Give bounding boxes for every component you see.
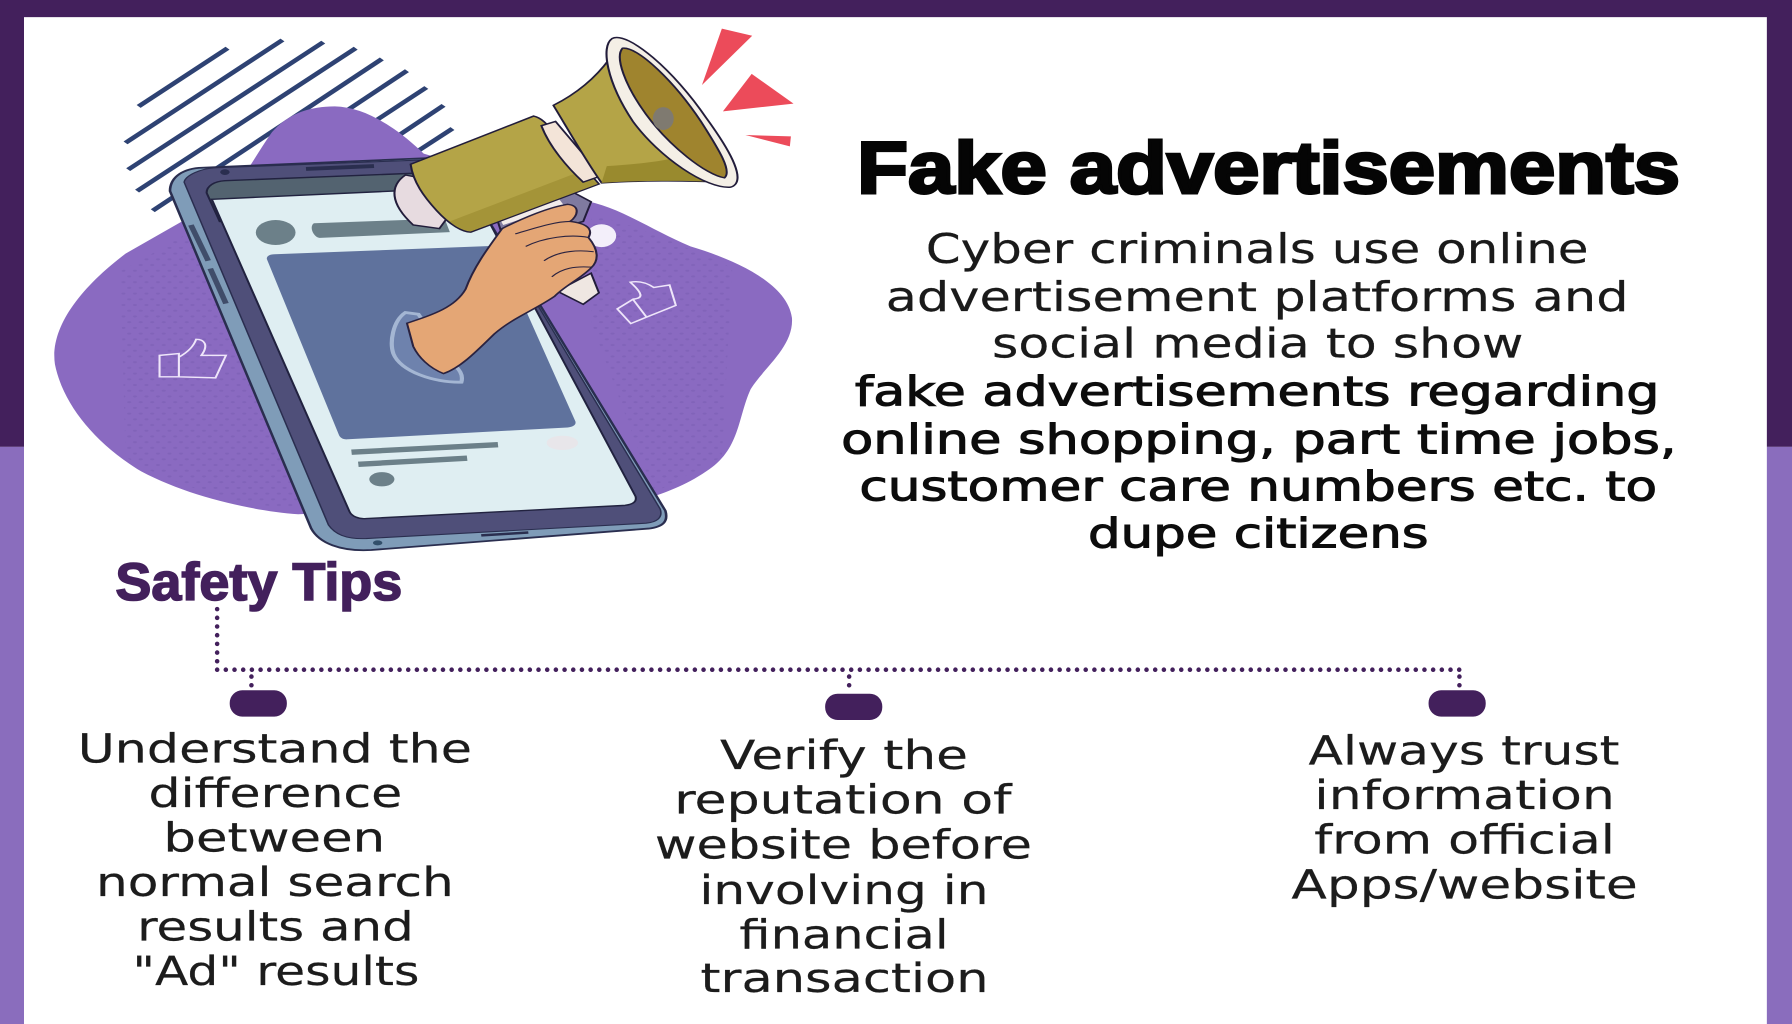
tip 2 text: transaction [701,956,989,1002]
camera [220,169,230,175]
tip 1 text: normal search [96,860,454,906]
bottom dot [373,540,382,545]
horn rim [606,38,738,187]
phone bezel [184,159,661,539]
tip 2 text: involving in [699,868,989,914]
name bar [312,219,450,238]
reaction marks [547,436,578,450]
tip 3 text: information [1314,773,1615,819]
tip 2 text: financial [739,913,949,959]
caption lines [352,445,498,464]
description text: advertisement platforms and [886,273,1629,321]
ad image [267,246,576,439]
description text: fake advertisements regarding [855,368,1659,416]
finger lines [515,221,594,277]
tip marker 3 [1429,690,1486,717]
avatar [256,220,296,245]
horn knob [653,107,674,130]
handle grip light [497,196,564,225]
tip 1 text: Understand the [78,726,472,772]
description text: Cyber criminals use online [926,225,1589,273]
handle lower end [557,273,599,304]
screen [212,188,636,519]
speaker bottom [481,532,528,535]
comment bubble [369,472,394,486]
horn [553,59,724,183]
tip 2 text: reputation of [674,778,1013,824]
phone [170,157,666,550]
handle [494,189,591,243]
horn shade [602,154,724,183]
tip marker 2 [825,694,882,720]
tip 1 text: "Ad" results [133,949,419,995]
arm [407,204,597,374]
title: Fake advertisements [857,128,1680,209]
thumbs up icon right [617,282,676,324]
white patch [587,224,616,247]
illustration: phone with megaphone [54,29,794,550]
thumbs up icon left [160,339,226,378]
background: light purple frame [0,447,1792,1024]
hole in screen [392,312,462,382]
description text: dupe citizens [1088,509,1429,557]
phone rim [170,157,666,550]
tip 3 text [1291,729,1638,908]
body shade [450,171,598,231]
tip 3 text: from official [1314,818,1615,864]
striped circle [126,40,452,211]
purple blob [54,106,792,514]
background: dark purple frame [0,0,1792,447]
horn inside [620,48,727,178]
description text: social media to show [992,320,1523,368]
tip 1 text [78,726,472,995]
tip 3 text: Always trust [1309,729,1619,775]
tip 2 text: Verify the [720,733,968,779]
side buttons [191,225,226,304]
phone top strip [207,171,502,250]
arm and hand [407,204,597,374]
speaker top [306,166,374,169]
tip 2 text: website before [655,822,1032,868]
tip 1 text: results and [137,905,414,951]
tip 1 text: between [163,815,385,861]
megaphone [394,38,738,304]
dotted connector [217,609,1461,686]
description text: online shopping, part time jobs, [841,416,1677,464]
safety tips heading: Safety Tips [115,553,402,612]
tip 1 text: difference [149,771,402,817]
red burst lines [702,29,794,146]
description text: customer care numbers etc. to [859,463,1657,511]
tip 2 text [655,733,1032,1002]
tip 3 text: Apps/website [1291,862,1638,908]
neck ring [541,121,602,182]
megaphone body [411,116,599,232]
megaphone rear ring [394,175,450,229]
description text [841,225,1677,557]
tip marker 1 [230,690,287,717]
